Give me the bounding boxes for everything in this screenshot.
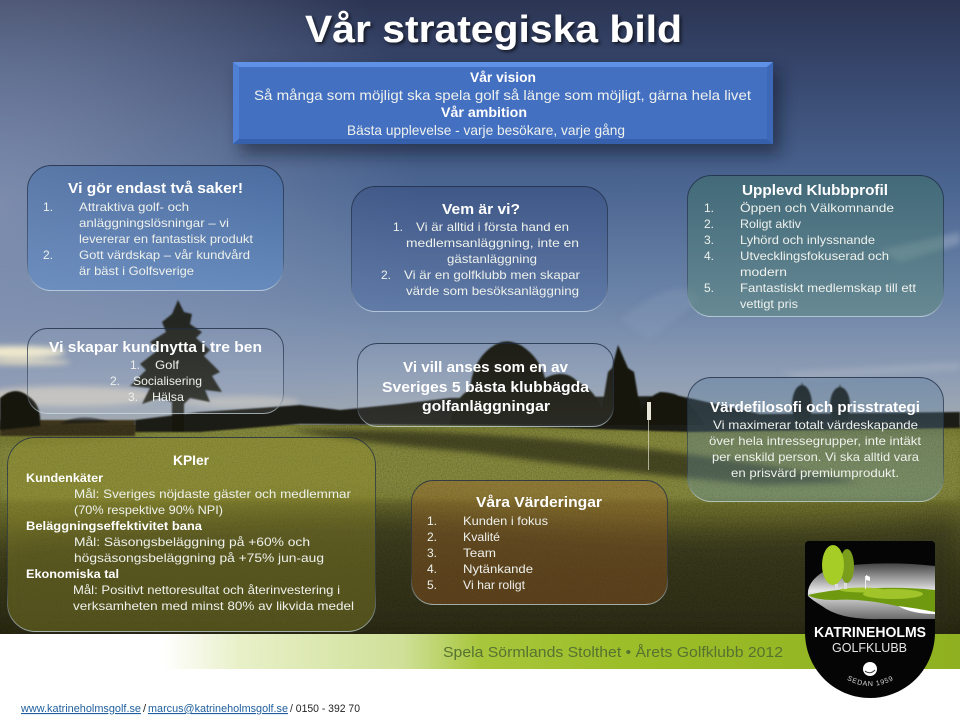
panel: Vi gör endast två saker: 1.: [43, 200, 53, 214]
contact line: /: [143, 703, 147, 715]
contact line: / 0150 - 392 70: [290, 703, 360, 715]
panel: Upplevd Klubbprofil: 5.: [704, 281, 714, 295]
panel: Vi gör endast två saker: Attraktiva golf- och: [79, 200, 189, 214]
panel: Våra Värderingar: Nytänkande: [463, 562, 533, 576]
panel: Vi vill anses: golfanläggningar: [422, 398, 550, 415]
panel: vision and ambition: Vår ambition: [441, 105, 527, 120]
panel: Upplevd Klubbprofil: Utvecklingsfokuserad och: [740, 249, 889, 263]
panel: KPIer: Ekonomiska tal: [26, 567, 119, 581]
logo: Katrineholms Golfklubb shield: SEDAN 1959: [848, 676, 892, 686]
bottom green band: [0, 634, 960, 669]
logo: Katrineholms Golfklubb shield: KATRINEHOLMS: [814, 625, 926, 641]
panel: Upplevd Klubbprofil: 2.: [704, 217, 714, 231]
panel: Upplevd Klubbprofil: Upplevd Klubbprofil: [742, 182, 888, 199]
slogan: Spela Sörmlands Stolthet • Årets Golfklubb 2012: [443, 644, 783, 661]
panel: Upplevd Klubbprofil: modern: [740, 265, 787, 279]
panel: Upplevd Klubbprofil: vettigt pris: [740, 297, 798, 311]
panel: KPIer: (70% respektive 90% NPI): [74, 503, 223, 517]
trees: [0, 300, 960, 432]
contact line: marcus@katrineholmsgolf.se: [148, 703, 288, 715]
panel: Våra Värderingar: Våra Värderingar: [476, 494, 602, 511]
panel: vision and ambition: Bästa upplevelse - varje besökare, varje gång: [347, 122, 625, 138]
flag pin: [647, 402, 651, 420]
panel: Värdefilosofi: en prisvärd premiumprodukt.: [731, 466, 899, 480]
panel: Vi skapar kundnytta: Golf: [155, 358, 180, 372]
panel: Vi skapar kundnytta: 1.: [130, 358, 140, 372]
panel: KPIer: Kundenkäter: [26, 471, 103, 485]
title: Vår strategiska bild: [305, 9, 682, 51]
panel: Vem är vi: Vem är vi?: [442, 201, 520, 218]
panel: KPIer: Mål: Sveriges nöjdaste gäster och medlemmar: [74, 487, 351, 501]
panel: Värdefilosofi: [688, 378, 944, 502]
panel: Våra Värderingar: Vi har roligt: [463, 578, 526, 592]
panel: Vem är vi: 2.: [381, 268, 391, 282]
panel: KPIer: Mål: Säsongsbeläggning på +60% och: [74, 535, 310, 549]
panel: Vem är vi: Vi är alltid i första hand en: [416, 220, 569, 234]
panel: Upplevd Klubbprofil: Lyhörd och inlyssnande: [740, 233, 875, 247]
panel: Vi vill anses: Vi vill anses som en av: [403, 359, 569, 376]
panel: Vi gör endast två saker: levererar en fantastisk produkt: [79, 232, 254, 246]
panel: Vi skapar kundnytta: Hälsa: [152, 390, 184, 404]
panel: Vem är vi: [352, 186, 608, 312]
panel: Vi gör endast två saker: [28, 166, 284, 290]
panel: Vi gör endast två saker: anläggningslösningar – vi: [79, 216, 229, 230]
panel: KPIer: Mål: Positivt nettoresultat och återinvestering i: [73, 583, 340, 597]
panel: Vi gör endast två saker: Vi gör endast två saker!: [68, 180, 243, 197]
logo: Katrineholms Golfklubb shield: GOLFKLUBB: [832, 640, 907, 655]
panel: KPIer: [8, 438, 376, 632]
panel: Våra Värderingar: 1.: [427, 514, 437, 528]
panel: Våra Värderingar: Kunden i fokus: [463, 514, 548, 528]
panel: Värdefilosofi: över hela intressegrupper, inte intäkt: [709, 434, 922, 448]
clouds: [0, 232, 960, 408]
panel: KPIer: högsäsongsbeläggning på +75% jun-aug: [74, 551, 324, 565]
panel: Vem är vi: värde som besöksanläggning: [406, 284, 579, 298]
panel: Upplevd Klubbprofil: 3.: [704, 233, 714, 247]
panel: Våra Värderingar: Team: [463, 546, 496, 560]
panel: Upplevd Klubbprofil: [688, 176, 944, 316]
panel: Upplevd Klubbprofil: 4.: [704, 249, 714, 263]
panel: Vem är vi: gästanläggning: [447, 252, 537, 266]
panel: vision and ambition: Vår vision: [470, 70, 536, 85]
panel: Vi skapar kundnytta: 2.: [110, 374, 120, 388]
panel: Våra Värderingar: 4.: [427, 562, 437, 576]
contact line: [20, 703, 360, 715]
panel: vision and ambition: [233, 62, 780, 154]
panel: Våra Värderingar: 3.: [427, 546, 437, 560]
panel: Vem är vi: medlemsanläggning, inte en: [406, 236, 579, 250]
panel: Värdefilosofi: Vi maximerar totalt värdeskapande: [713, 418, 918, 432]
panel: Vi gör endast två saker: Gott värdskap – vår kundvård: [79, 248, 250, 262]
panel: Vi gör endast två saker: är bäst i Golfsverige: [79, 264, 194, 278]
panel: Vi skapar kundnytta: Vi skapar kundnytta i tre ben: [49, 339, 262, 356]
panel: Vi skapar kundnytta: Socialisering: [133, 374, 202, 388]
panel: vision and ambition: Så många som möjligt ska spela golf så länge som möjligt, gärna hela livet: [254, 87, 751, 103]
panel: Värdefilosofi: per enskild person. Vi ska alltid vara: [712, 450, 919, 464]
contact line: www.katrineholmsgolf.se: [20, 703, 141, 715]
panel: Vi vill anses: [358, 344, 614, 426]
panel: Vi skapar kundnytta: [28, 328, 284, 414]
panel: Värdefilosofi: Värdefilosofi och prisstrategi: [710, 399, 920, 416]
panel: Upplevd Klubbprofil: Fantastiskt medlemskap till ett: [740, 281, 917, 295]
panel: Vi skapar kundnytta: 3.: [128, 390, 138, 404]
panel: KPIer: verksamheten med minst 80% av likvida medel: [73, 599, 354, 613]
panel: Våra Värderingar: Kvalité: [463, 530, 500, 544]
panel: Våra Värderingar: 2.: [427, 530, 437, 544]
panel: Vi vill anses: Sveriges 5 bästa klubbägda: [382, 379, 590, 396]
panel: Vem är vi: 1.: [393, 220, 403, 234]
panel: Vem är vi: Vi är en golfklubb men skapar: [404, 268, 580, 282]
panel: Våra Värderingar: 5.: [427, 578, 437, 592]
panel: Upplevd Klubbprofil: 1.: [704, 201, 714, 215]
panel: Upplevd Klubbprofil: Roligt aktiv: [740, 217, 801, 231]
panel: Vi gör endast två saker: 2.: [43, 248, 53, 262]
panel: Våra Värderingar: [412, 480, 668, 604]
panel: KPIer: Beläggningseffektivitet bana: [26, 519, 202, 533]
panel: KPIer: KPIer: [173, 452, 210, 468]
panel: Upplevd Klubbprofil: Öppen och Välkomnande: [740, 201, 894, 215]
grass: [0, 425, 960, 634]
logo: Katrineholms Golfklubb shield: [805, 541, 935, 698]
